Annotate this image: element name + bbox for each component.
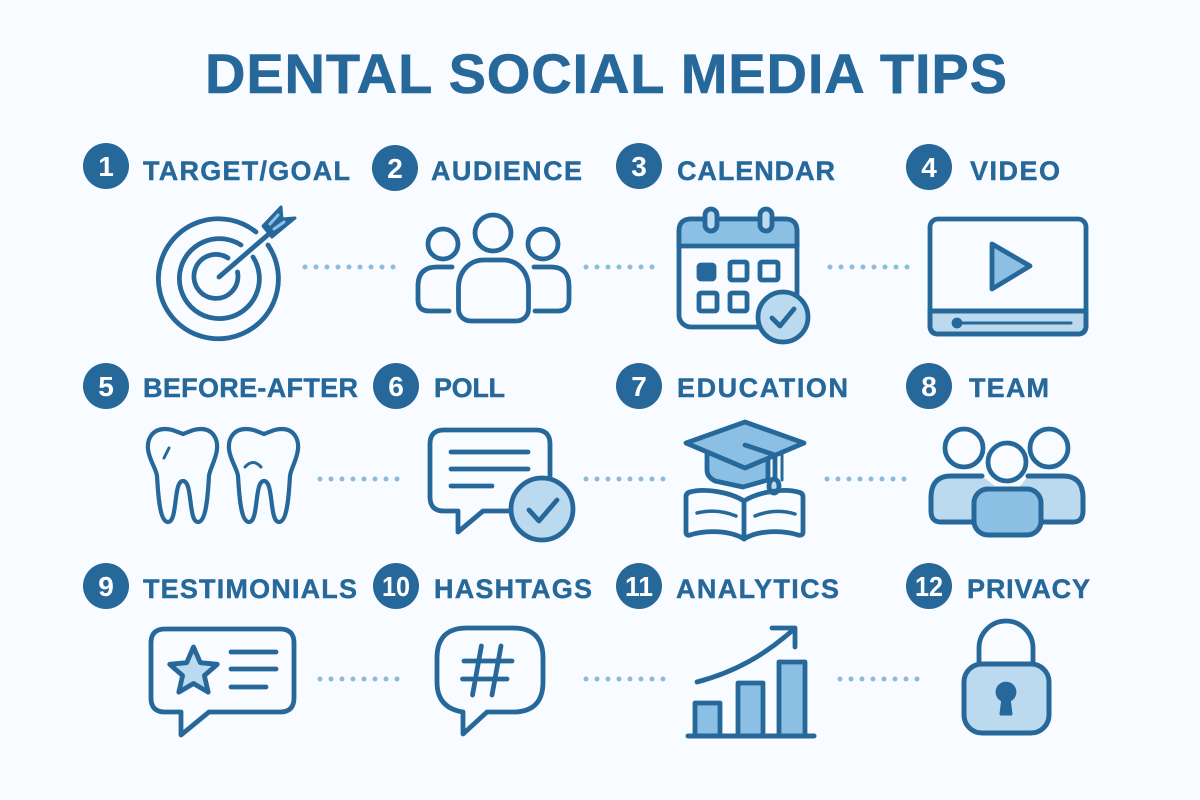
icon: padlock: [964, 621, 1049, 733]
number badge 9: 9: [98, 571, 114, 602]
icon: growth bar chart: [688, 628, 814, 736]
number badge 6: [373, 363, 419, 409]
number badge 12: 12: [915, 571, 943, 602]
icon: video player: [930, 219, 1086, 334]
number badge 6: 6: [388, 371, 404, 402]
number badge 4: [906, 144, 952, 190]
heading: EDUCATION: [677, 373, 848, 403]
number badge 7: [616, 363, 662, 409]
heading: BEFORE-AFTER: [143, 373, 358, 403]
heading: HASHTAGS: [434, 574, 592, 604]
heading: CALENDAR: [677, 156, 835, 186]
number badge 8: [906, 363, 952, 409]
heading: ANALYTICS: [676, 574, 839, 604]
number badge 11: 11: [625, 571, 653, 602]
connector dots 2-3: [586, 264, 652, 270]
connector dots 3-4: [830, 264, 907, 270]
number badge 3: 3: [631, 151, 647, 182]
tip 5: before-after: [83, 363, 358, 522]
number badge 3: [616, 143, 662, 189]
number badge 12: [906, 563, 952, 609]
number badge 9: [83, 563, 129, 609]
icon: two teeth: [148, 429, 298, 522]
icon: calendar with check: [679, 209, 808, 342]
tip 4: video: [906, 144, 1086, 334]
icon: review bubble with star: [151, 629, 294, 735]
connector dots 7-8: [827, 476, 904, 482]
icon: hashtag bubble: [437, 628, 543, 734]
connector dots 10-11: [586, 676, 663, 682]
tip 12: privacy: [906, 563, 1090, 733]
tip 8: team: [906, 363, 1083, 535]
tip 6: poll: [373, 363, 573, 540]
heading: VIDEO: [970, 156, 1060, 186]
connector dots 9-10: [320, 676, 397, 682]
tip 7: education: [616, 363, 848, 539]
icon: target with arrow: [158, 207, 295, 339]
tip 11: analytics: [616, 563, 839, 736]
heading: AUDIENCE: [431, 156, 582, 186]
tip 1: target/goal: [83, 143, 350, 339]
heading: TESTIMONIALS: [143, 574, 357, 604]
heading: PRIVACY: [967, 574, 1090, 604]
number badge 4: 4: [921, 152, 937, 183]
number badge 5: 5: [98, 371, 114, 402]
icon: team of three: [931, 429, 1083, 535]
number badge 10: [373, 563, 419, 609]
number badge 1: [83, 143, 129, 189]
number badge 2: [372, 145, 418, 191]
tip 2: audience: [372, 145, 582, 321]
number badge 7: 7: [631, 371, 647, 402]
number badge 11: [616, 563, 662, 609]
connector dots 5-6: [320, 476, 397, 482]
title: DENTAL SOCIAL MEDIA TIPS: [205, 42, 1007, 105]
number badge 10: 10: [382, 571, 410, 602]
tip 9: testimonials: [83, 563, 357, 735]
number badge 1: 1: [98, 151, 114, 182]
number badge 8: 8: [921, 371, 937, 402]
heading: TARGET/GOAL: [143, 156, 350, 186]
tip 3: calendar: [616, 143, 835, 342]
number badge 5: [83, 363, 129, 409]
icon: audience: [418, 215, 569, 321]
icon: chat bubble with check: [430, 430, 573, 540]
connector dots 6-7: [586, 476, 663, 482]
heading: POLL: [434, 373, 505, 403]
number badge 2: 2: [387, 153, 403, 184]
heading: TEAM: [969, 373, 1049, 403]
icon: graduation cap and book: [686, 422, 804, 539]
tip 10: hashtags: [373, 563, 592, 734]
connector dots 1-2: [305, 264, 393, 270]
connector dots 11-12: [840, 676, 917, 682]
